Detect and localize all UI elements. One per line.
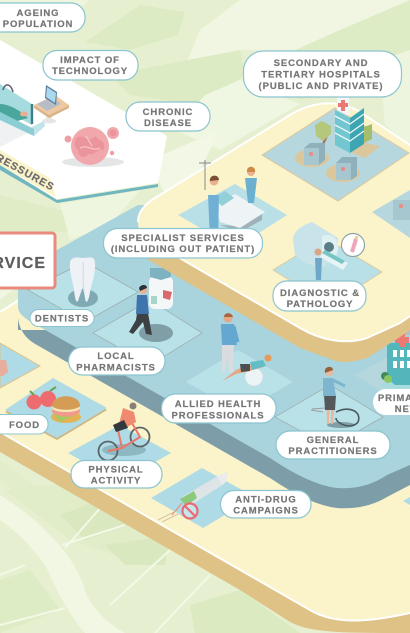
tile: clipped lower right [403, 497, 410, 505]
bubble: allied health professionals: ALLIED HEALTH [175, 399, 261, 410]
bubble: secondary and tertiary hospitals: SECONDARY AND [274, 58, 368, 69]
bubble: secondary and tertiary hospitals: TERTIARY HOSPITALS [261, 70, 381, 80]
bubble: physical activity [71, 460, 162, 488]
bubble: ageing population: AGEING [17, 8, 59, 19]
bubble: anti-drug campaigns: CAMPAIGNS [233, 506, 299, 516]
tile: right campus clipped [372, 190, 410, 238]
bubble: primary health networks [373, 389, 410, 415]
panel: community platform [0, 285, 410, 633]
icon: primary care clinic [380, 288, 410, 389]
tile: allied health [186, 350, 293, 412]
tile: anti-drug [151, 468, 255, 528]
bubble: diagnostic and pathology: DIAGNOSTIC & [280, 288, 360, 299]
bubble: general practitioners: GENERAL [307, 435, 359, 446]
icon: apples and burger [26, 387, 81, 423]
bubble: diagnostic and pathology: PATHOLOGY [287, 299, 353, 310]
bubble: chronic disease [126, 102, 210, 131]
icon: physiotherapist and patient [221, 313, 272, 386]
bubble: physical activity: PHYSICAL [88, 464, 144, 476]
bubble: specialist services [104, 228, 262, 258]
small buildings [304, 143, 357, 180]
bubble: impact of technology: IMPACT OF [60, 55, 120, 66]
bubble: specialist services: SPECIALIST SERVICES [121, 233, 245, 244]
tile: primary networks [355, 350, 410, 400]
icon: doctor and stethoscope [311, 367, 359, 428]
bubble: allied health professionals: PROFESSIONALS [172, 410, 264, 422]
icon: test tube circle [342, 234, 364, 256]
bubble: general practitioners [276, 431, 390, 459]
icon: pharmacist carrying jar [129, 268, 173, 342]
bubble: diagnostic and pathology [273, 281, 366, 311]
icon: patient scanner [0, 84, 45, 147]
icon: clipped figure [0, 360, 8, 376]
bubble: ageing population [0, 3, 85, 32]
bubble: chronic disease: CHRONIC [143, 107, 193, 118]
icon: hospital campus [295, 92, 380, 182]
service title box [0, 233, 55, 288]
bubble: specialist services: (INCLUDING OUT PATIENT) [111, 244, 255, 255]
bubble: food: FOOD [9, 420, 40, 431]
panel: hospital platform [138, 92, 410, 362]
bubble: general practitioners: PRACTITIONERS [288, 446, 378, 457]
bubble: local pharmacists [68, 347, 165, 375]
panel: pressures platform [0, 40, 167, 203]
tile: hospitals [262, 108, 409, 201]
bubble: local pharmacists: LOCAL [97, 351, 135, 362]
tile: left clipped [0, 343, 40, 388]
bubble: anti-drug campaigns [220, 490, 311, 518]
tile: diagnostic [273, 238, 382, 305]
icon: MRI machine [293, 222, 364, 280]
icon: hospital bed with staff [199, 160, 265, 240]
icon: tooth [68, 257, 98, 307]
tile: pharmacists [93, 300, 202, 365]
icon: syringe with prohibition [158, 472, 228, 522]
bubble: secondary and tertiary hospitals [244, 51, 402, 97]
panel: primary care platform [18, 205, 410, 508]
bubble: allied health professionals [162, 394, 276, 423]
icon: laptop on desk [34, 85, 69, 124]
tile: food [5, 378, 107, 440]
tile: dentists [28, 262, 138, 322]
tile: general practitioners [275, 385, 383, 447]
bubble: local pharmacists: PHARMACISTS [76, 362, 156, 374]
tile: specialist [178, 184, 287, 248]
icon: cyclist [98, 402, 150, 460]
bubble: ageing population: POPULATION [3, 19, 73, 30]
bubble: impact of technology [43, 50, 138, 80]
bubble: anti-drug campaigns: ANTI-DRUG [235, 494, 297, 506]
tile: physical activity [68, 425, 171, 482]
bubble: impact of technology: TECHNOLOGY [52, 66, 128, 77]
bubble: chronic disease: DISEASE [144, 118, 192, 129]
icon: clipped small building [393, 200, 410, 220]
bubble: dentists [30, 310, 94, 326]
icon: chronic disease cell [62, 127, 124, 167]
bubble: food [0, 414, 48, 434]
bubble: secondary and tertiary hospitals: (PUBLIC AND PRIVATE) [259, 81, 383, 92]
bubble: dentists: DENTISTS [35, 314, 89, 324]
bubble: physical activity: ACTIVITY [91, 476, 141, 486]
